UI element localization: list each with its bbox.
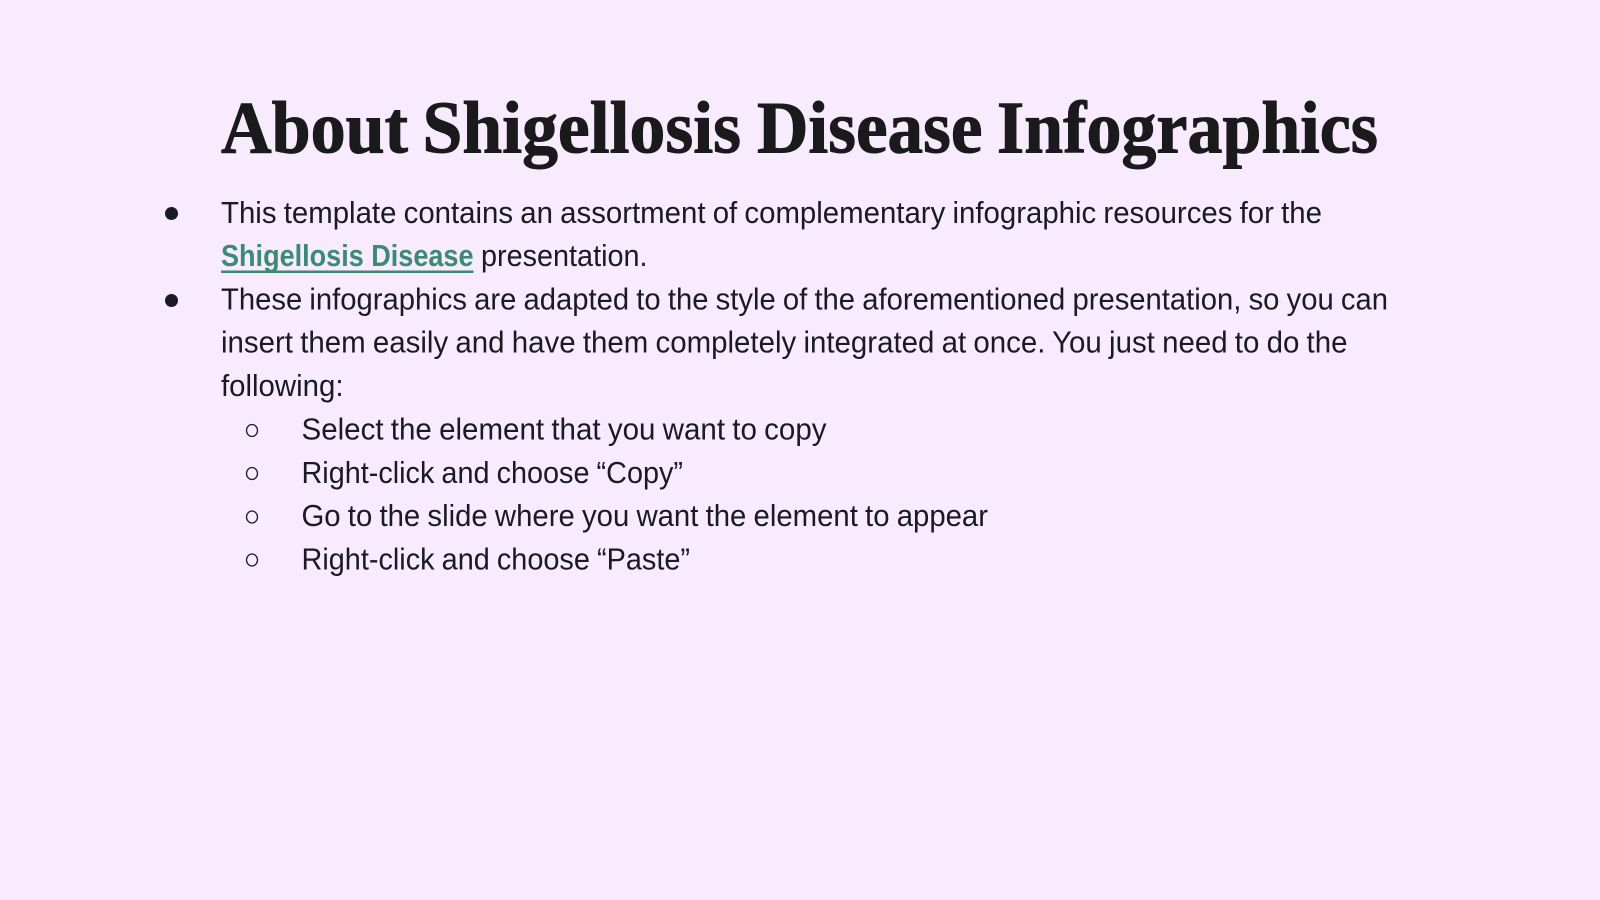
bullet item: template description: presentation.	[481, 238, 648, 273]
bullet item: adaptation instructions	[165, 282, 1388, 403]
bullet item: template description	[165, 195, 1322, 273]
bullet item: template description: This template contains an assortment of complementary infographic resources for the	[221, 195, 1322, 230]
title: Disease	[757, 88, 982, 170]
bullet item: adaptation instructions: These infographics are adapted to the style of the aforementioned presentation, so you can	[221, 282, 1388, 316]
title: Shigellosis	[422, 88, 741, 170]
sub-bullet: select: Select the element that you want to copy	[302, 412, 827, 446]
bullet item: adaptation instructions: insert them easily and have them completely integrated at once. You just need to do the	[221, 324, 1348, 360]
sub-bullet: go to slide: Go to the slide where you want the element to appear	[302, 498, 988, 533]
bullet list	[165, 195, 1388, 576]
bullet item: adaptation instructions: following:	[221, 368, 344, 403]
sub-bullet: copy: Right-click and choose “Copy”	[302, 455, 683, 490]
title	[221, 88, 1378, 170]
sub-bullet: paste: Right-click and choose “Paste”	[302, 542, 690, 576]
title: About	[221, 88, 408, 170]
title: Infographics	[997, 88, 1378, 170]
bullet item: template description: Shigellosis Disease	[221, 238, 474, 273]
